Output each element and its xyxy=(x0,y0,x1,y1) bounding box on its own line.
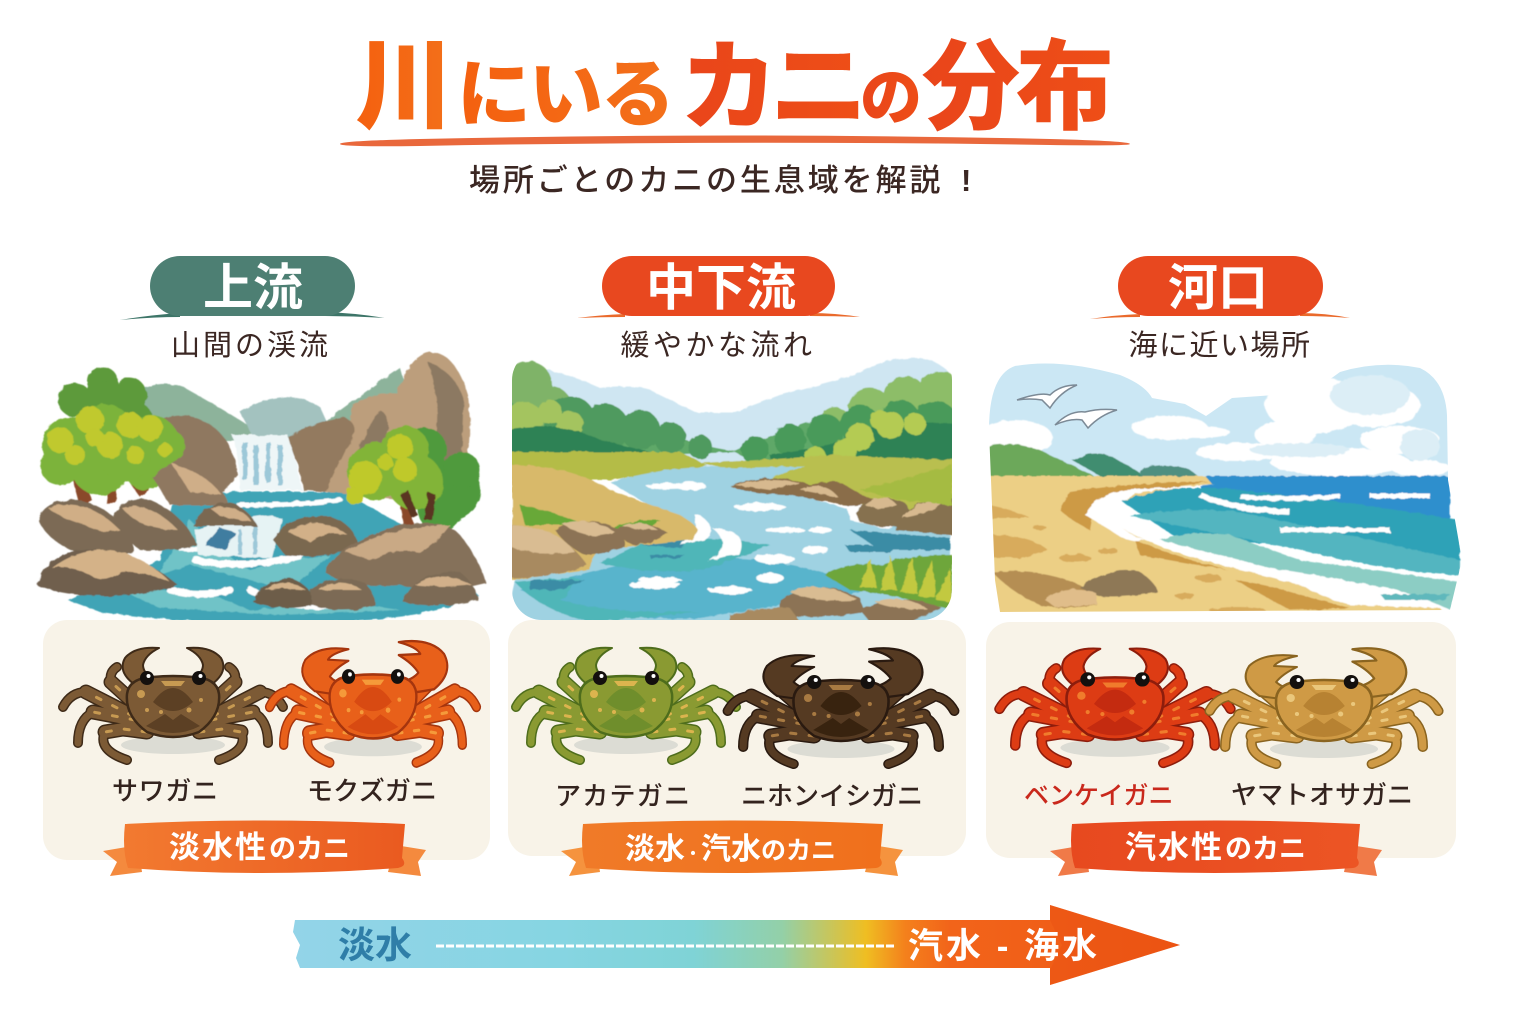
arrow: 淡水から海水へ xyxy=(293,905,1180,985)
card: 上流のカニ xyxy=(43,620,490,860)
subheading: 山間の渓流 xyxy=(171,329,331,362)
scene: gentle river xyxy=(504,358,964,625)
subtitle: 場所ごとのカニの生息域を解説 xyxy=(469,163,943,198)
ribbon: 汽水性のカニ: 汽水性のカニ xyxy=(1125,830,1306,865)
birds xyxy=(1017,385,1117,428)
label: 汽水・海水: 汽水 - 海水 xyxy=(908,927,1100,966)
title: 分布 xyxy=(922,32,1110,142)
title: 川 xyxy=(355,31,453,141)
ribbon: 淡水性のカニ xyxy=(103,820,426,876)
panel: 上流 xyxy=(37,256,490,876)
ribbon: 淡水・汽水のカニ xyxy=(561,820,903,876)
heading: 上流 xyxy=(120,256,385,320)
title: カニ xyxy=(680,32,860,142)
ribbon: 淡水性のカニ: 淡水性のカニ xyxy=(169,830,350,865)
card: 中下流のカニ xyxy=(508,620,966,856)
heading: 河口 xyxy=(1090,256,1350,319)
subheading: 緩やかな流れ xyxy=(620,329,816,362)
crab: モクズガニ xyxy=(270,641,476,763)
label: ベンケイガニ: ベンケイガニ xyxy=(1024,782,1174,810)
crab: サワガニ xyxy=(63,648,283,760)
crab: ベンケイガニ xyxy=(1000,649,1230,763)
crab: ヤマトオサガニ xyxy=(1210,648,1438,764)
label: アカテガニ: アカテガニ xyxy=(555,781,690,811)
arrow dashed line xyxy=(436,944,895,948)
label: モクズガニ: モクズガニ xyxy=(307,776,437,806)
subtitle: ! xyxy=(961,163,971,198)
crab: ニホンイシガニ xyxy=(728,648,954,764)
title xyxy=(355,31,1110,142)
title underline xyxy=(340,136,1130,146)
heading: 中下流: 中下流 xyxy=(646,260,796,316)
label: ニホンイシガニ: ニホンイシガニ xyxy=(741,781,923,811)
crab: アカテガニ xyxy=(516,648,736,760)
title: にいる xyxy=(457,53,673,136)
title: の xyxy=(860,64,922,133)
heading: 中下流 xyxy=(577,256,860,318)
ribbon: 汽水性のカニ xyxy=(1050,820,1382,876)
ribbon: 淡水・汽水のカニ: 淡水・汽水のカニ xyxy=(625,833,836,866)
heading: 上流: 上流 xyxy=(203,260,303,316)
scene: seashore xyxy=(989,364,1462,612)
scene: mountain stream xyxy=(37,352,486,623)
label: 淡水: 淡水 xyxy=(338,925,412,966)
heading: 河口: 河口 xyxy=(1168,260,1268,316)
label: ヤマトオサガニ: ヤマトオサガニ xyxy=(1231,780,1413,810)
subheading: 海に近い場所 xyxy=(1128,329,1312,362)
card: 河口のカニ xyxy=(986,622,1456,858)
panel: 中下流 xyxy=(504,256,966,876)
panel: 河口 xyxy=(977,256,1470,876)
label: サワガニ: サワガニ xyxy=(112,776,218,806)
